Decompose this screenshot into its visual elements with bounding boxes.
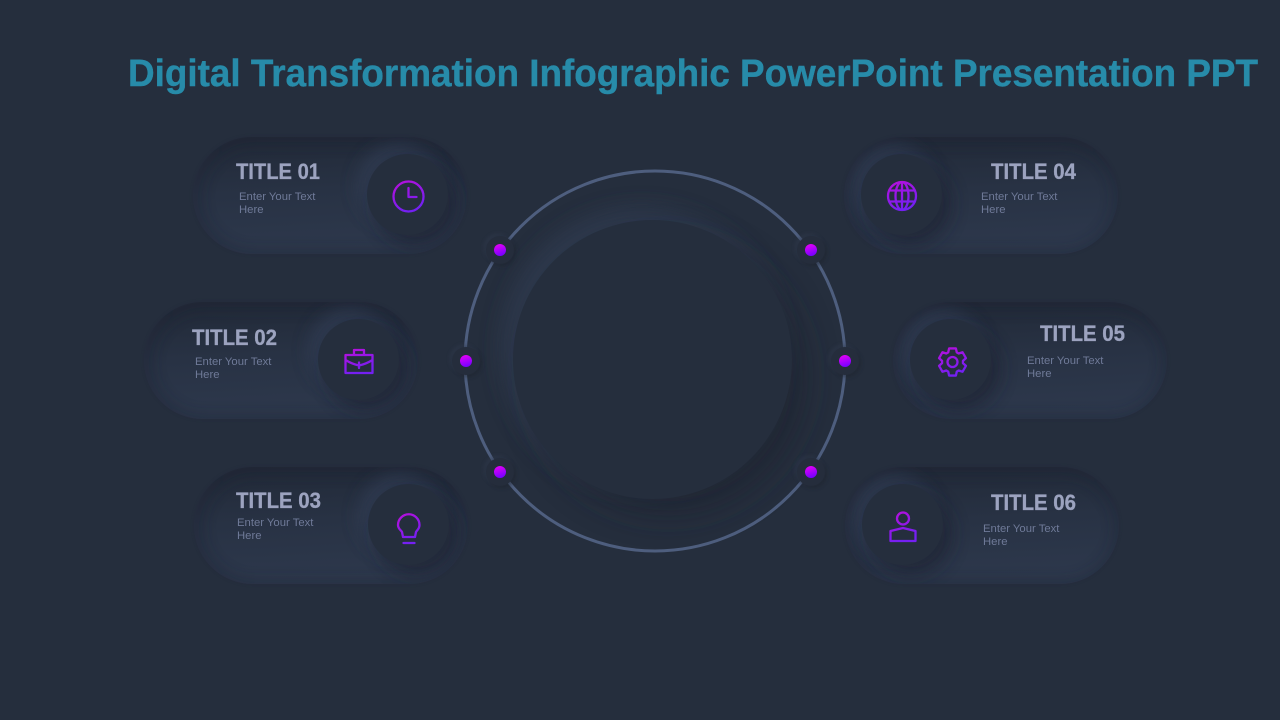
text block: title 05: Here bbox=[1027, 368, 1052, 380]
outer ring bbox=[465, 171, 845, 551]
node: lower right bbox=[794, 456, 828, 488]
panel: title 02 bbox=[143, 301, 420, 421]
central circle graphic bbox=[450, 171, 862, 551]
icon: gear bbox=[939, 348, 966, 376]
heading: title 03: TITLE 03 bbox=[236, 488, 321, 513]
icon: clock bbox=[394, 182, 424, 212]
text block: title 06: Here bbox=[983, 536, 1008, 548]
icon: globe bbox=[888, 182, 916, 210]
heading: title 02: TITLE 02 bbox=[192, 325, 277, 350]
icon: person bbox=[890, 512, 916, 541]
panel: title 04 bbox=[843, 136, 1120, 256]
node: upper left bbox=[484, 234, 516, 266]
text block: title 03: Enter Your Text bbox=[237, 517, 314, 529]
text block: title 03: Here bbox=[237, 530, 262, 542]
panel: title 01 bbox=[192, 136, 469, 256]
text block: title 04: Enter Your Text bbox=[981, 191, 1058, 203]
title: Digital Transformation Infographic PowerPoint Presentation PPT bbox=[128, 53, 1258, 95]
text block: title 05: Enter Your Text bbox=[1027, 355, 1104, 367]
inner disk shading bbox=[502, 209, 808, 516]
heading: title 05: TITLE 05 bbox=[1040, 321, 1125, 346]
text block: title 04: Here bbox=[981, 204, 1006, 216]
panel: title 05 bbox=[892, 301, 1169, 421]
text block: title 02: Enter Your Text bbox=[195, 356, 272, 368]
node: lower left bbox=[484, 456, 516, 488]
text block: title 01: Here bbox=[239, 204, 264, 216]
icon: light bulb bbox=[398, 514, 420, 543]
text block: title 01: Enter Your Text bbox=[239, 191, 316, 203]
node: upper right bbox=[794, 234, 828, 266]
node: middle left bbox=[450, 344, 482, 378]
icon: briefcase bbox=[346, 350, 372, 373]
heading: title 06: TITLE 06 bbox=[991, 490, 1076, 515]
text block: title 06: Enter Your Text bbox=[983, 523, 1060, 535]
heading: title 04: TITLE 04 bbox=[991, 159, 1077, 184]
node: middle right bbox=[828, 344, 862, 378]
heading: title 01: TITLE 01 bbox=[236, 159, 320, 184]
panel: title 03 bbox=[193, 466, 470, 586]
inner disk bbox=[513, 220, 792, 499]
text block: title 02: Here bbox=[195, 369, 220, 381]
panel: title 06 bbox=[844, 466, 1121, 586]
